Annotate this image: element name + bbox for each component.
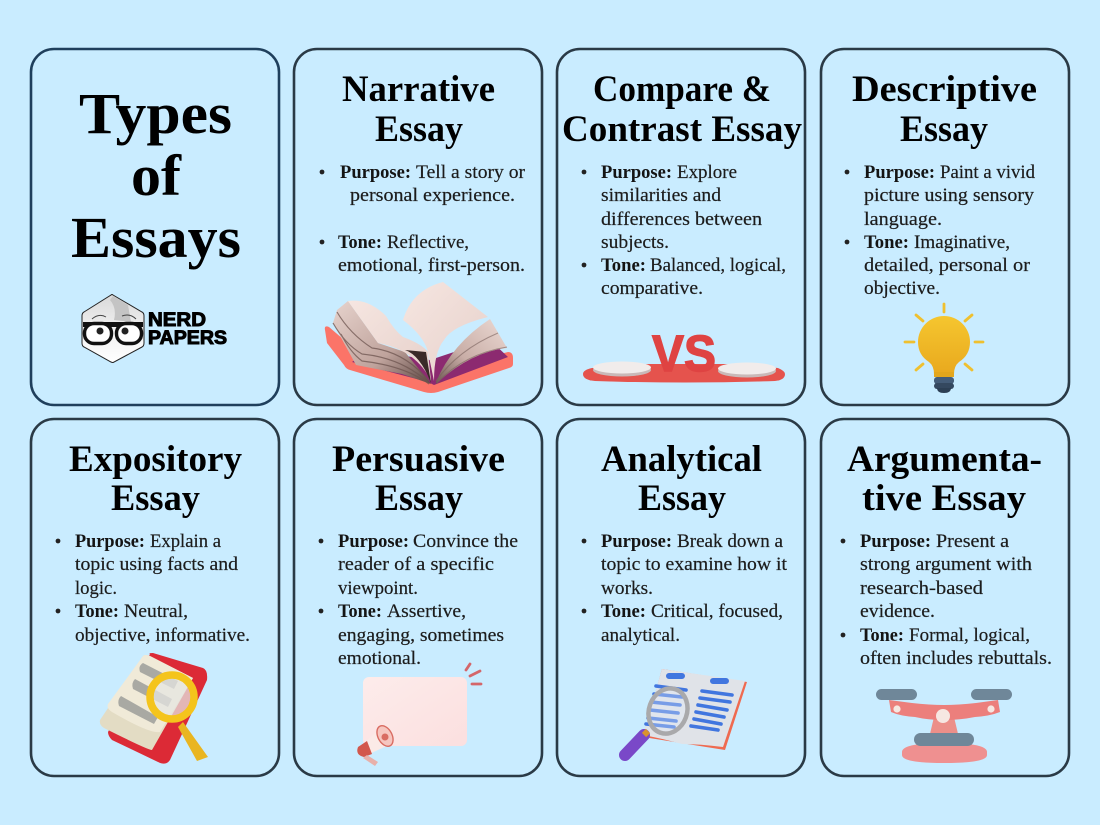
title: Types of Essays: Types	[79, 81, 232, 146]
text: expository purpose and tone: topic using facts and	[75, 555, 239, 575]
panel: compare and contrast essay	[557, 49, 805, 405]
logo: Nerd Papers: PAPERS	[148, 327, 227, 349]
text: compare purpose and tone: Balanced, logical,	[650, 256, 786, 276]
text: descriptive purpose and tone: Purpose:	[864, 163, 935, 183]
text: descriptive purpose and tone: picture using sensory	[864, 186, 1035, 206]
heading: Compare & Contrast Essay	[562, 69, 802, 150]
text: narrative purpose and tone	[320, 163, 525, 276]
title: Types of Essays: of	[131, 143, 182, 208]
text: narrative purpose and tone: Tone:	[338, 233, 382, 253]
text: persuasive purpose and tone: emotional.	[338, 649, 421, 669]
heading: Descriptive Essay: Descriptive	[852, 69, 1037, 110]
text: persuasive purpose and tone: viewpoint.	[338, 579, 418, 599]
text: analytical purpose and tone: Purpose:	[601, 532, 672, 552]
text: compare purpose and tone: comparative.	[601, 279, 703, 299]
icon: open book with magnifying glass	[625, 669, 747, 755]
text: argumentative purpose and tone: Present a	[936, 532, 1009, 552]
panel: argumentative essay	[821, 419, 1069, 776]
text: expository purpose and tone: Neutral,	[124, 602, 188, 622]
logo: Nerd Papers: NERD	[148, 309, 206, 331]
text: analytical purpose and tone: analytical.	[601, 626, 680, 646]
text: descriptive purpose and tone: detailed, personal or	[864, 256, 1030, 276]
text: analytical purpose and tone	[582, 532, 788, 646]
title: Types of Essays	[71, 81, 241, 270]
text: descriptive purpose and tone: Imaginative,	[914, 233, 1010, 253]
text: narrative purpose and tone: personal experience.	[350, 186, 515, 206]
text: persuasive purpose and tone: reader of a specific	[338, 555, 494, 575]
text: descriptive purpose and tone: Paint a vivid	[940, 163, 1036, 183]
text: argumentative purpose and tone: Formal, logical,	[909, 626, 1030, 646]
heading: Argumentative Essay: tive Essay	[862, 478, 1027, 519]
heading: Argumentative Essay: Argumenta-	[847, 439, 1042, 480]
icon: open book	[325, 282, 513, 393]
text: compare purpose and tone: subjects.	[601, 233, 669, 253]
text: narrative purpose and tone: emotional, first-person.	[338, 256, 525, 276]
text: expository purpose and tone: Tone:	[75, 602, 119, 622]
heading: Expository Essay: Essay	[111, 478, 200, 519]
heading: Narrative Essay	[342, 69, 495, 150]
text: argumentative purpose and tone: often includes rebuttals.	[860, 649, 1052, 669]
icon: speech bubble with megaphone	[357, 664, 481, 766]
text: descriptive purpose and tone: Tone:	[864, 233, 909, 253]
text: expository purpose and tone: logic.	[75, 579, 117, 599]
panel: descriptive essay	[821, 49, 1069, 405]
icon: versus podium: VS	[652, 325, 716, 382]
heading: Narrative Essay: Essay	[375, 109, 463, 150]
text: expository purpose and tone: Purpose:	[75, 532, 145, 552]
heading: Persuasive Essay: Essay	[375, 478, 463, 519]
text: expository purpose and tone: Explain a	[150, 532, 221, 552]
heading: Expository Essay	[69, 439, 242, 519]
text: descriptive purpose and tone: objective.	[864, 279, 940, 299]
icon: versus podium	[583, 325, 785, 382]
heading: Narrative Essay: Narrative	[342, 69, 495, 110]
text: persuasive purpose and tone: engaging, sometimes	[338, 626, 504, 646]
text: persuasive purpose and tone: Convince the	[413, 532, 518, 552]
text: narrative purpose and tone: Purpose:	[340, 163, 411, 183]
heading: Analytical Essay: Analytical	[601, 439, 762, 480]
text: expository purpose and tone: objective, informative.	[75, 626, 250, 646]
text: analytical purpose and tone: Break down a	[677, 532, 783, 552]
text: narrative purpose and tone: Reflective,	[387, 233, 469, 253]
heading: Descriptive Essay	[852, 69, 1037, 150]
heading: Expository Essay: Expository	[69, 439, 242, 480]
heading: Persuasive Essay	[332, 439, 505, 519]
panel: title	[31, 49, 279, 405]
text: expository purpose and tone	[56, 532, 250, 646]
text: argumentative purpose and tone: Purpose:	[860, 532, 931, 552]
heading: Argumentative Essay	[847, 439, 1042, 519]
text: argumentative purpose and tone: research-based	[860, 579, 984, 599]
text: argumentative purpose and tone	[841, 532, 1052, 669]
panel: expository essay	[31, 419, 279, 776]
panel: narrative essay	[294, 49, 542, 405]
heading: Compare & Contrast Essay: Contrast Essay	[562, 109, 802, 150]
text: compare purpose and tone: Tone:	[601, 256, 646, 276]
text: persuasive purpose and tone	[319, 532, 518, 669]
heading: Persuasive Essay: Persuasive	[332, 439, 505, 480]
text: persuasive purpose and tone: Purpose:	[338, 532, 409, 552]
icon: document with magnifier	[100, 653, 208, 764]
heading: Analytical Essay	[601, 439, 762, 519]
heading: Descriptive Essay: Essay	[900, 109, 988, 150]
icon: balance scale	[876, 689, 1012, 763]
text: compare purpose and tone: Explore	[677, 163, 737, 183]
text: compare purpose and tone: similarities and	[601, 186, 722, 206]
panel: persuasive essay	[294, 419, 542, 776]
text: analytical purpose and tone: works.	[601, 579, 653, 599]
text: descriptive purpose and tone	[845, 163, 1036, 299]
heading: Compare & Contrast Essay: Compare &	[593, 69, 771, 110]
title: Types of Essays: Essays	[71, 205, 241, 270]
heading: Analytical Essay: Essay	[638, 478, 726, 519]
logo: Nerd Papers	[82, 294, 227, 362]
icon: light bulb	[905, 304, 983, 393]
text: descriptive purpose and tone: language.	[864, 210, 942, 230]
text: argumentative purpose and tone: strong argument with	[860, 555, 1032, 575]
text: compare purpose and tone: Purpose:	[601, 163, 672, 183]
text: persuasive purpose and tone: Assertive,	[387, 602, 466, 622]
text: argumentative purpose and tone: evidence.	[860, 602, 935, 622]
panel: analytical essay	[557, 419, 805, 776]
text: argumentative purpose and tone: Tone:	[860, 626, 904, 646]
text: analytical purpose and tone: Critical, focused,	[651, 602, 783, 622]
text: compare purpose and tone	[582, 163, 786, 299]
text: analytical purpose and tone: topic to examine how it	[601, 555, 788, 575]
text: analytical purpose and tone: Tone:	[601, 602, 646, 622]
text: narrative purpose and tone: Tell a story or	[416, 163, 525, 183]
text: persuasive purpose and tone: Tone:	[338, 602, 382, 622]
text: compare purpose and tone: differences between	[601, 210, 762, 230]
